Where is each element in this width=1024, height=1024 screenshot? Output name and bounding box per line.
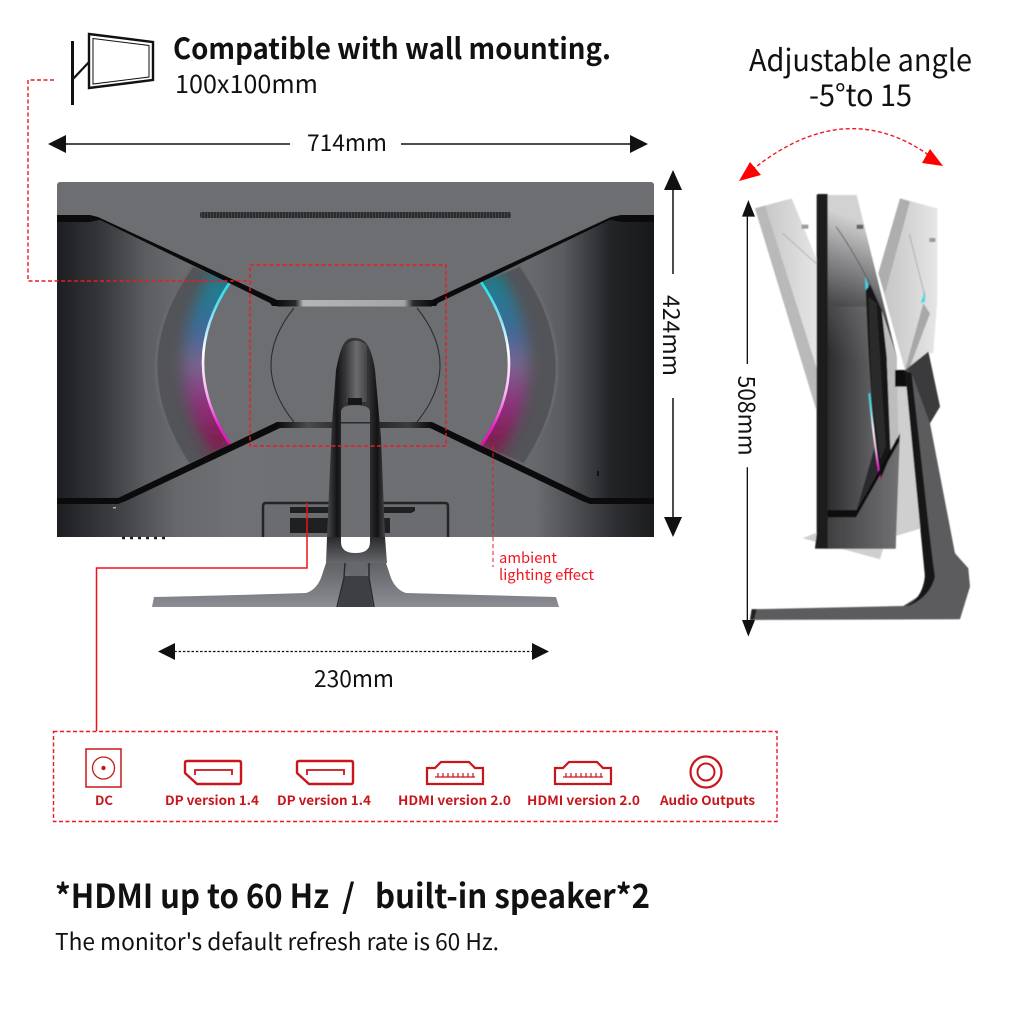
- footer heading: built-in speaker*2: [375, 870, 650, 918]
- tilt arc arrow: [739, 129, 943, 181]
- footer note: The monitor's default refresh rate is 60 Hz.: [55, 923, 499, 957]
- height dimension arrow: 424mm: [656, 170, 690, 537]
- side vent: [857, 225, 863, 229]
- lower X bands: [57, 422, 654, 504]
- footer heading: [55, 870, 650, 918]
- side stand: [750, 352, 970, 620]
- port labels: DC: [95, 790, 113, 809]
- icon: audio: [690, 756, 722, 788]
- width dimension arrow: 714mm: 714mm: [307, 124, 387, 158]
- height dimension arrow: 424mm: 424mm: [656, 295, 690, 376]
- subtitle: VESA size: 100x100mm: [175, 65, 318, 101]
- small marks: [113, 471, 599, 538]
- cable hole: [341, 537, 370, 553]
- icon: DP 1: [185, 761, 241, 784]
- top vent grille: [200, 212, 511, 218]
- side height arrow: 508mm: [732, 200, 766, 637]
- light bar: [277, 300, 432, 306]
- port labels: DP version 1.4: [277, 790, 371, 809]
- icon: HDMI 1: [427, 762, 483, 784]
- side body mid shading: [828, 307, 877, 510]
- port leader line: [96, 503, 307, 731]
- port labels: HDMI version 2.0: [398, 790, 511, 809]
- left ambient light band: [156, 265, 231, 465]
- front bezel: [815, 194, 828, 549]
- heading: adjustable angle: [749, 36, 972, 115]
- centre mount arcs: [271, 308, 440, 422]
- port labels: HDMI version 2.0: [527, 790, 640, 809]
- side monitor artwork: [750, 194, 970, 620]
- ambient lighting callout: [493, 446, 594, 585]
- monitor rear view: [57, 182, 654, 607]
- left side wedge: [57, 220, 272, 504]
- magenta light: [869, 393, 880, 478]
- monitor back shell: [57, 182, 654, 537]
- neck lower flare: [326, 537, 387, 563]
- heading: adjustable angle: Adjustable angle: [749, 36, 972, 80]
- icon: DP 2: [297, 761, 353, 784]
- width dimension arrow: 714mm: [48, 124, 648, 158]
- port labels: DP version 1.4: [165, 790, 259, 809]
- icon: HDMI 2: [555, 762, 611, 784]
- bottom port compartment: [263, 503, 448, 537]
- tilted ghost right: [878, 198, 937, 536]
- VESA dashed box and leader: [28, 80, 446, 446]
- recess inner panel: [868, 297, 886, 460]
- footer heading: /: [342, 870, 355, 918]
- lower shell: [57, 428, 654, 537]
- neck loop crossing: [341, 422, 370, 424]
- lower body: [827, 433, 900, 549]
- footer heading: *HDMI up to 60 Hz: [55, 870, 329, 918]
- ambient lighting callout: ambient: [499, 547, 557, 568]
- neck loop cap: [348, 398, 362, 405]
- tilted ghost left: [755, 198, 883, 559]
- right ambient light band: [481, 265, 557, 465]
- base width arrow: 230mm: 230mm: [314, 660, 394, 694]
- wall mount icon: [72, 34, 153, 105]
- base width arrow: 230mm: [158, 643, 549, 694]
- side body: [827, 195, 897, 549]
- neck loop interior: [341, 405, 370, 537]
- heading: adjustable angle: -5°to 15: [809, 71, 912, 115]
- neck upper inset: [346, 340, 367, 402]
- port labels: Audio Outputs: [659, 790, 755, 809]
- port labels: [95, 790, 755, 809]
- lit strip beside recess: [882, 310, 898, 455]
- black recess: [866, 284, 891, 479]
- title: wall mounting: Compatible with wall mounting.: [173, 26, 611, 68]
- upper X bands: [57, 215, 654, 306]
- panel: port list: [54, 732, 777, 822]
- icon: DC: [86, 749, 121, 787]
- right side wedge: [436, 220, 654, 504]
- ambient lighting callout: lighting effect: [499, 564, 594, 585]
- side crease: [836, 227, 884, 313]
- centre panel: [272, 306, 436, 428]
- monitor side view: [732, 194, 970, 637]
- base foot: [152, 563, 559, 607]
- stand neck: [327, 338, 385, 537]
- side height arrow: 508mm: 508mm: [732, 376, 766, 456]
- lower bar: [277, 422, 432, 428]
- side band: [827, 433, 900, 517]
- cyan light: [865, 276, 869, 291]
